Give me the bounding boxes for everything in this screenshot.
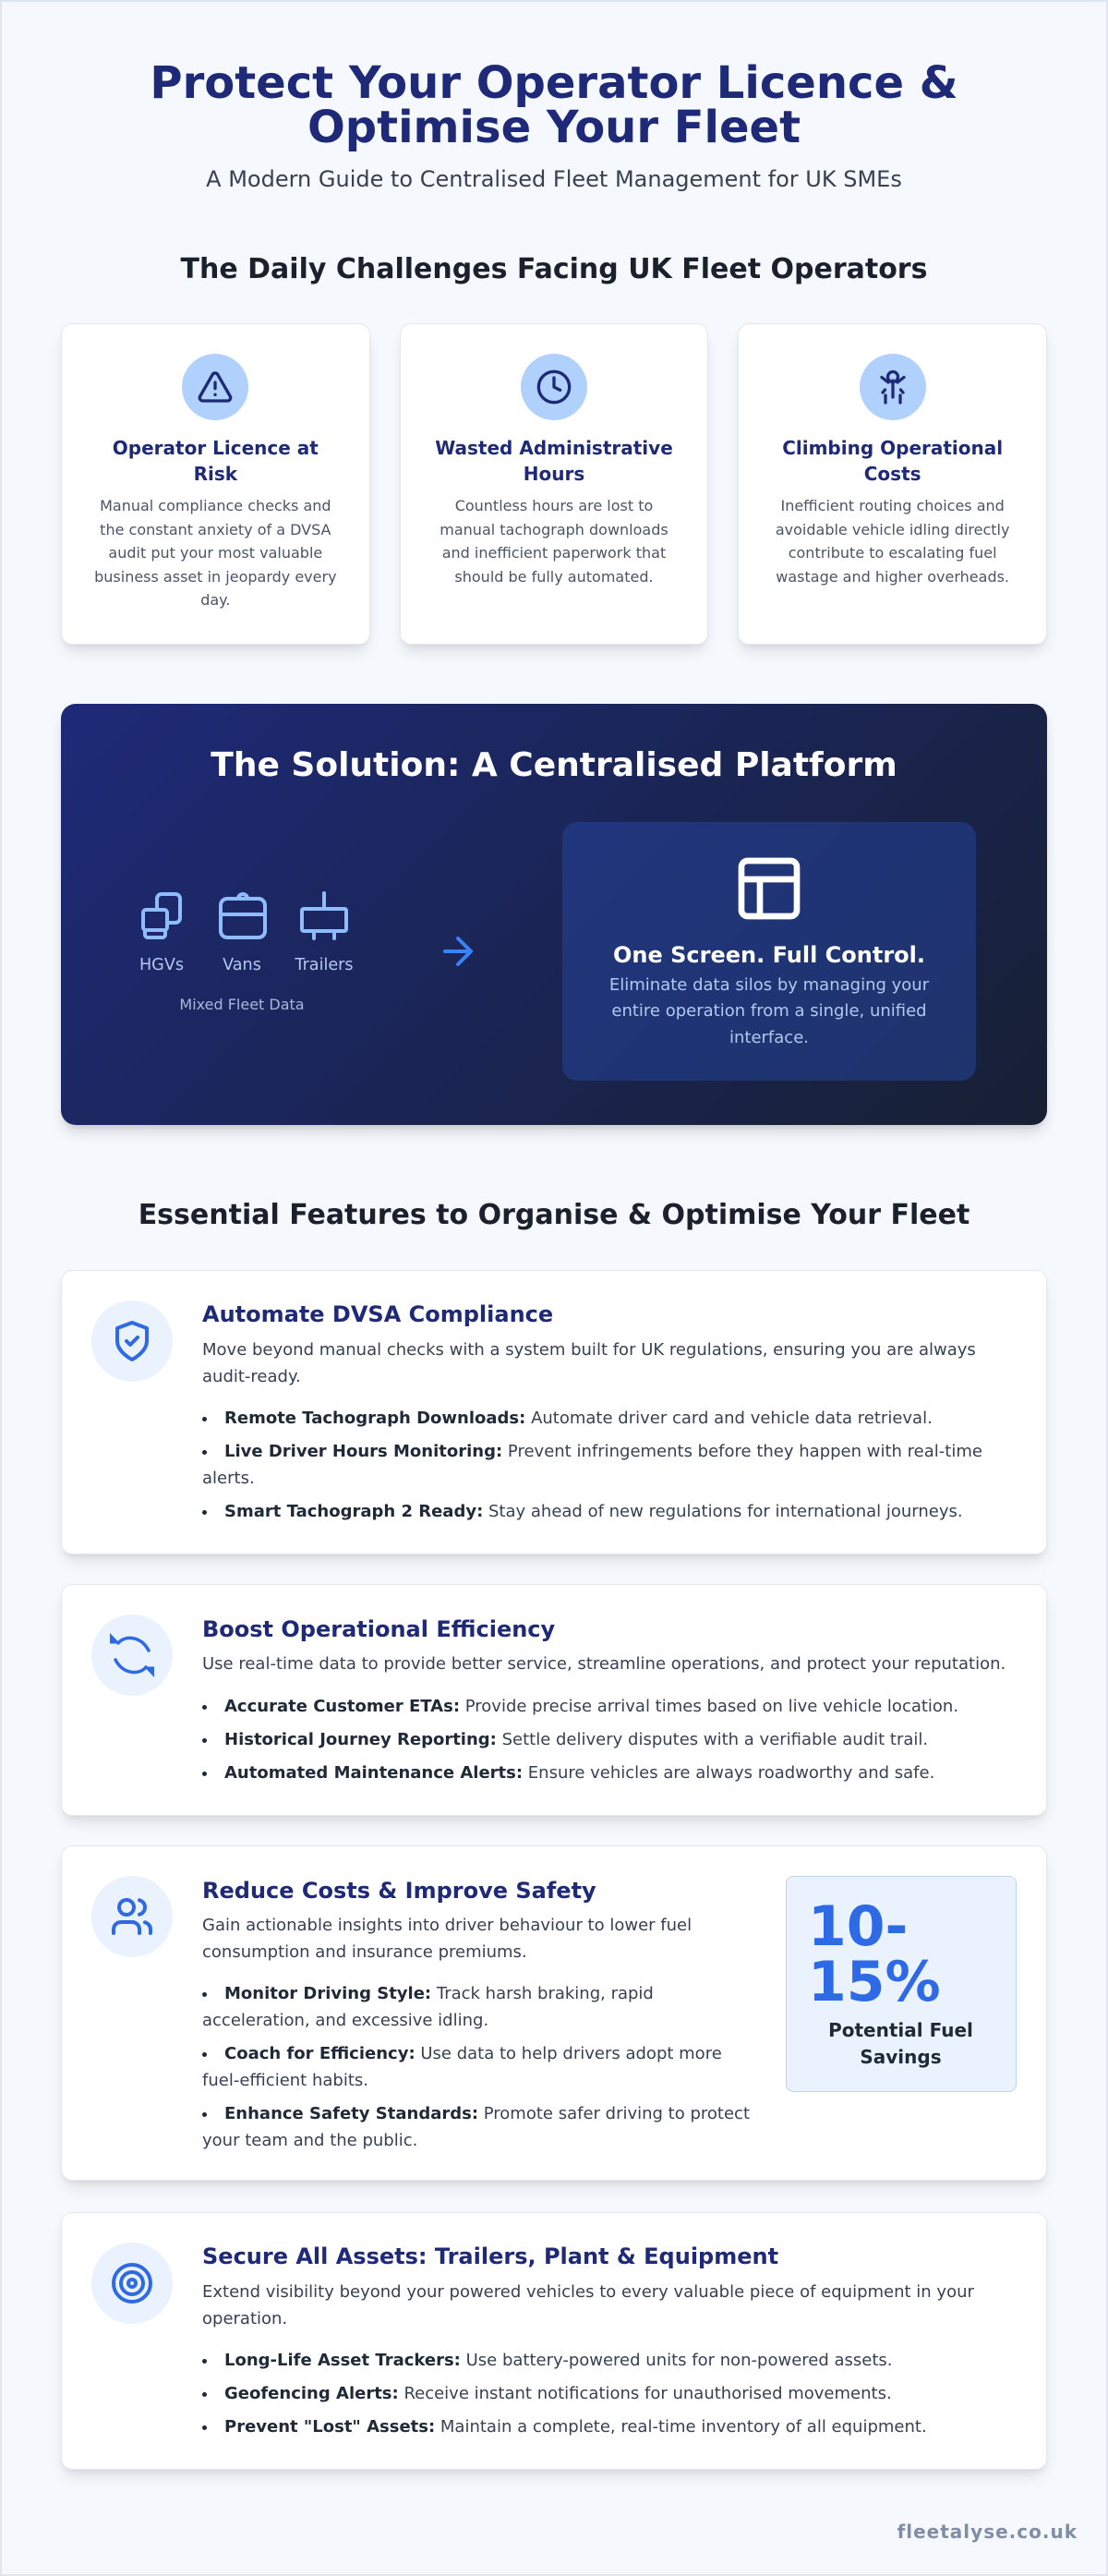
panel text: Eliminate data silos by managing your entire operation from a single, unified interface. [609, 975, 929, 1047]
feature description: Gain actionable insights into driver behaviour to lower fuel consumption and insurance premiums. [202, 1916, 692, 1962]
title: Protect Your Operator Licence & Optimise Your Fleet [150, 57, 958, 153]
feature list: Geofencing Alerts: Receive instant notifications for unauthorised movements. [224, 2384, 892, 2403]
statistic: 10-15% [808, 1894, 941, 2014]
feature text [202, 2243, 974, 2437]
feature list: Automated Maintenance Alerts: Ensure vehicles are always roadworthy and safe. [224, 1763, 934, 1783]
feature list [202, 1409, 982, 1521]
feature list: Enhance Safety Standards: Promote safer driving to protect your team and the public. [202, 2104, 750, 2150]
feature list: Accurate Customer ETAs: Provide precise arrival times based on live vehicle location. [224, 1697, 958, 1716]
panel: reduce costs and improve safety [61, 1845, 1047, 2181]
panel: one screen [562, 822, 976, 1081]
label: vans: Vans [223, 956, 261, 974]
caption: mixed fleet data: Mixed Fleet Data [179, 996, 305, 1013]
subtitle: A Modern Guide to Centralised Fleet Management for UK SMEs [206, 166, 902, 192]
heading: daily challenges: The Daily Challenges Facing UK Fleet Operators [181, 253, 927, 285]
icon: shield [91, 1300, 173, 1382]
feature text [202, 1877, 750, 2150]
icon: clock [521, 354, 587, 420]
icon: trailers [300, 891, 348, 940]
panel heading: One Screen. Full Control. [613, 942, 925, 968]
feature list: Long-Life Asset Trackers: Use battery-powered units for non-powered assets. [224, 2351, 893, 2370]
card text: Manual compliance checks and the constant anxiety of a DVSA audit put your most valuable business asset in jeopardy every day. [94, 497, 337, 609]
callout: fuel savings [786, 1876, 1017, 2092]
icon: refresh arrows [91, 1615, 173, 1696]
icon: dashboard layout [739, 857, 800, 920]
feature text [202, 1301, 982, 1521]
feature heading: Reduce Costs & Improve Safety [202, 1877, 596, 1903]
feature list: Historical Journey Reporting: Settle delivery disputes with a verifiable audit trail. [224, 1730, 928, 1749]
label: HGVs: HGVs [139, 956, 184, 974]
feature heading: Boost Operational Efficiency [202, 1616, 555, 1642]
panel: automate DVSA compliance [61, 1269, 1047, 1554]
feature description: Move beyond manual checks with a system built for UK regulations, ensuring you are always audit-ready. [202, 1340, 976, 1386]
panel: wasted administrative hours [400, 323, 708, 645]
feature list [202, 1984, 750, 2150]
statistic label: Potential Fuel Savings [828, 2019, 973, 2068]
feature list: Prevent "Lost" Assets: Maintain a complete, real-time inventory of all equipment. [224, 2417, 927, 2437]
feature heading: Secure All Assets: Trailers, Plant & Equipment [202, 2243, 778, 2269]
feature list: Remote Tachograph Downloads: Automate driver card and vehicle data retrieval. [224, 1409, 933, 1428]
feature heading: Automate DVSA Compliance [202, 1301, 553, 1327]
icon: HGVs [141, 892, 182, 939]
feature text [202, 1616, 1006, 1783]
panel: climbing operational costs [738, 323, 1047, 645]
feature list: Live Driver Hours Monitoring: Prevent infringements before they happen with real-time alerts. [202, 1442, 982, 1488]
label: trailers: Trailers [295, 956, 354, 974]
card heading: Operator Licence at Risk [113, 437, 319, 485]
heading: essential features: Essential Features to Organise & Optimise Your Fleet [138, 1199, 970, 1230]
panel: operator licence at risk [61, 323, 370, 645]
card text: Countless hours are lost to manual tachograph downloads and inefficient paperwork that should be fully automated. [440, 497, 668, 586]
feature list [202, 2351, 927, 2437]
arrow [443, 937, 473, 966]
feature list: Coach for Efficiency: Use data to help drivers adopt more fuel-efficient habits. [202, 2044, 722, 2090]
icon: vans [219, 892, 267, 939]
feature description: Use real-time data to provide better service, streamline operations, and protect your reputation. [202, 1654, 1006, 1674]
card text: Inefficient routing choices and avoidable vehicle idling directly contribute to escalating fuel wastage and higher overheads. [776, 497, 1009, 586]
icon: rocket [860, 354, 926, 420]
icon: users [91, 1876, 173, 1957]
panel: the solution [61, 704, 1047, 1125]
icon: warning triangle [182, 354, 248, 420]
feature list: Monitor Driving Style: Track harsh braking, rapid acceleration, and excessive idling. [202, 1984, 654, 2030]
footer brand: fleetalyse.co.uk [897, 2521, 1078, 2543]
feature list: Smart Tachograph 2 Ready: Stay ahead of new regulations for international journeys. [224, 1502, 963, 1521]
feature list [202, 1697, 958, 1783]
solution heading: The Solution: A Centralised Platform [211, 746, 897, 784]
icon: target [91, 2243, 173, 2324]
card heading: Wasted Administrative Hours [435, 437, 673, 485]
panel: secure all assets [61, 2211, 1047, 2470]
feature description: Extend visibility beyond your powered vehicles to every valuable piece of equipment in your operation. [202, 2282, 974, 2328]
panel: boost operational efficiency [61, 1584, 1047, 1816]
card heading: Climbing Operational Costs [782, 437, 1003, 485]
